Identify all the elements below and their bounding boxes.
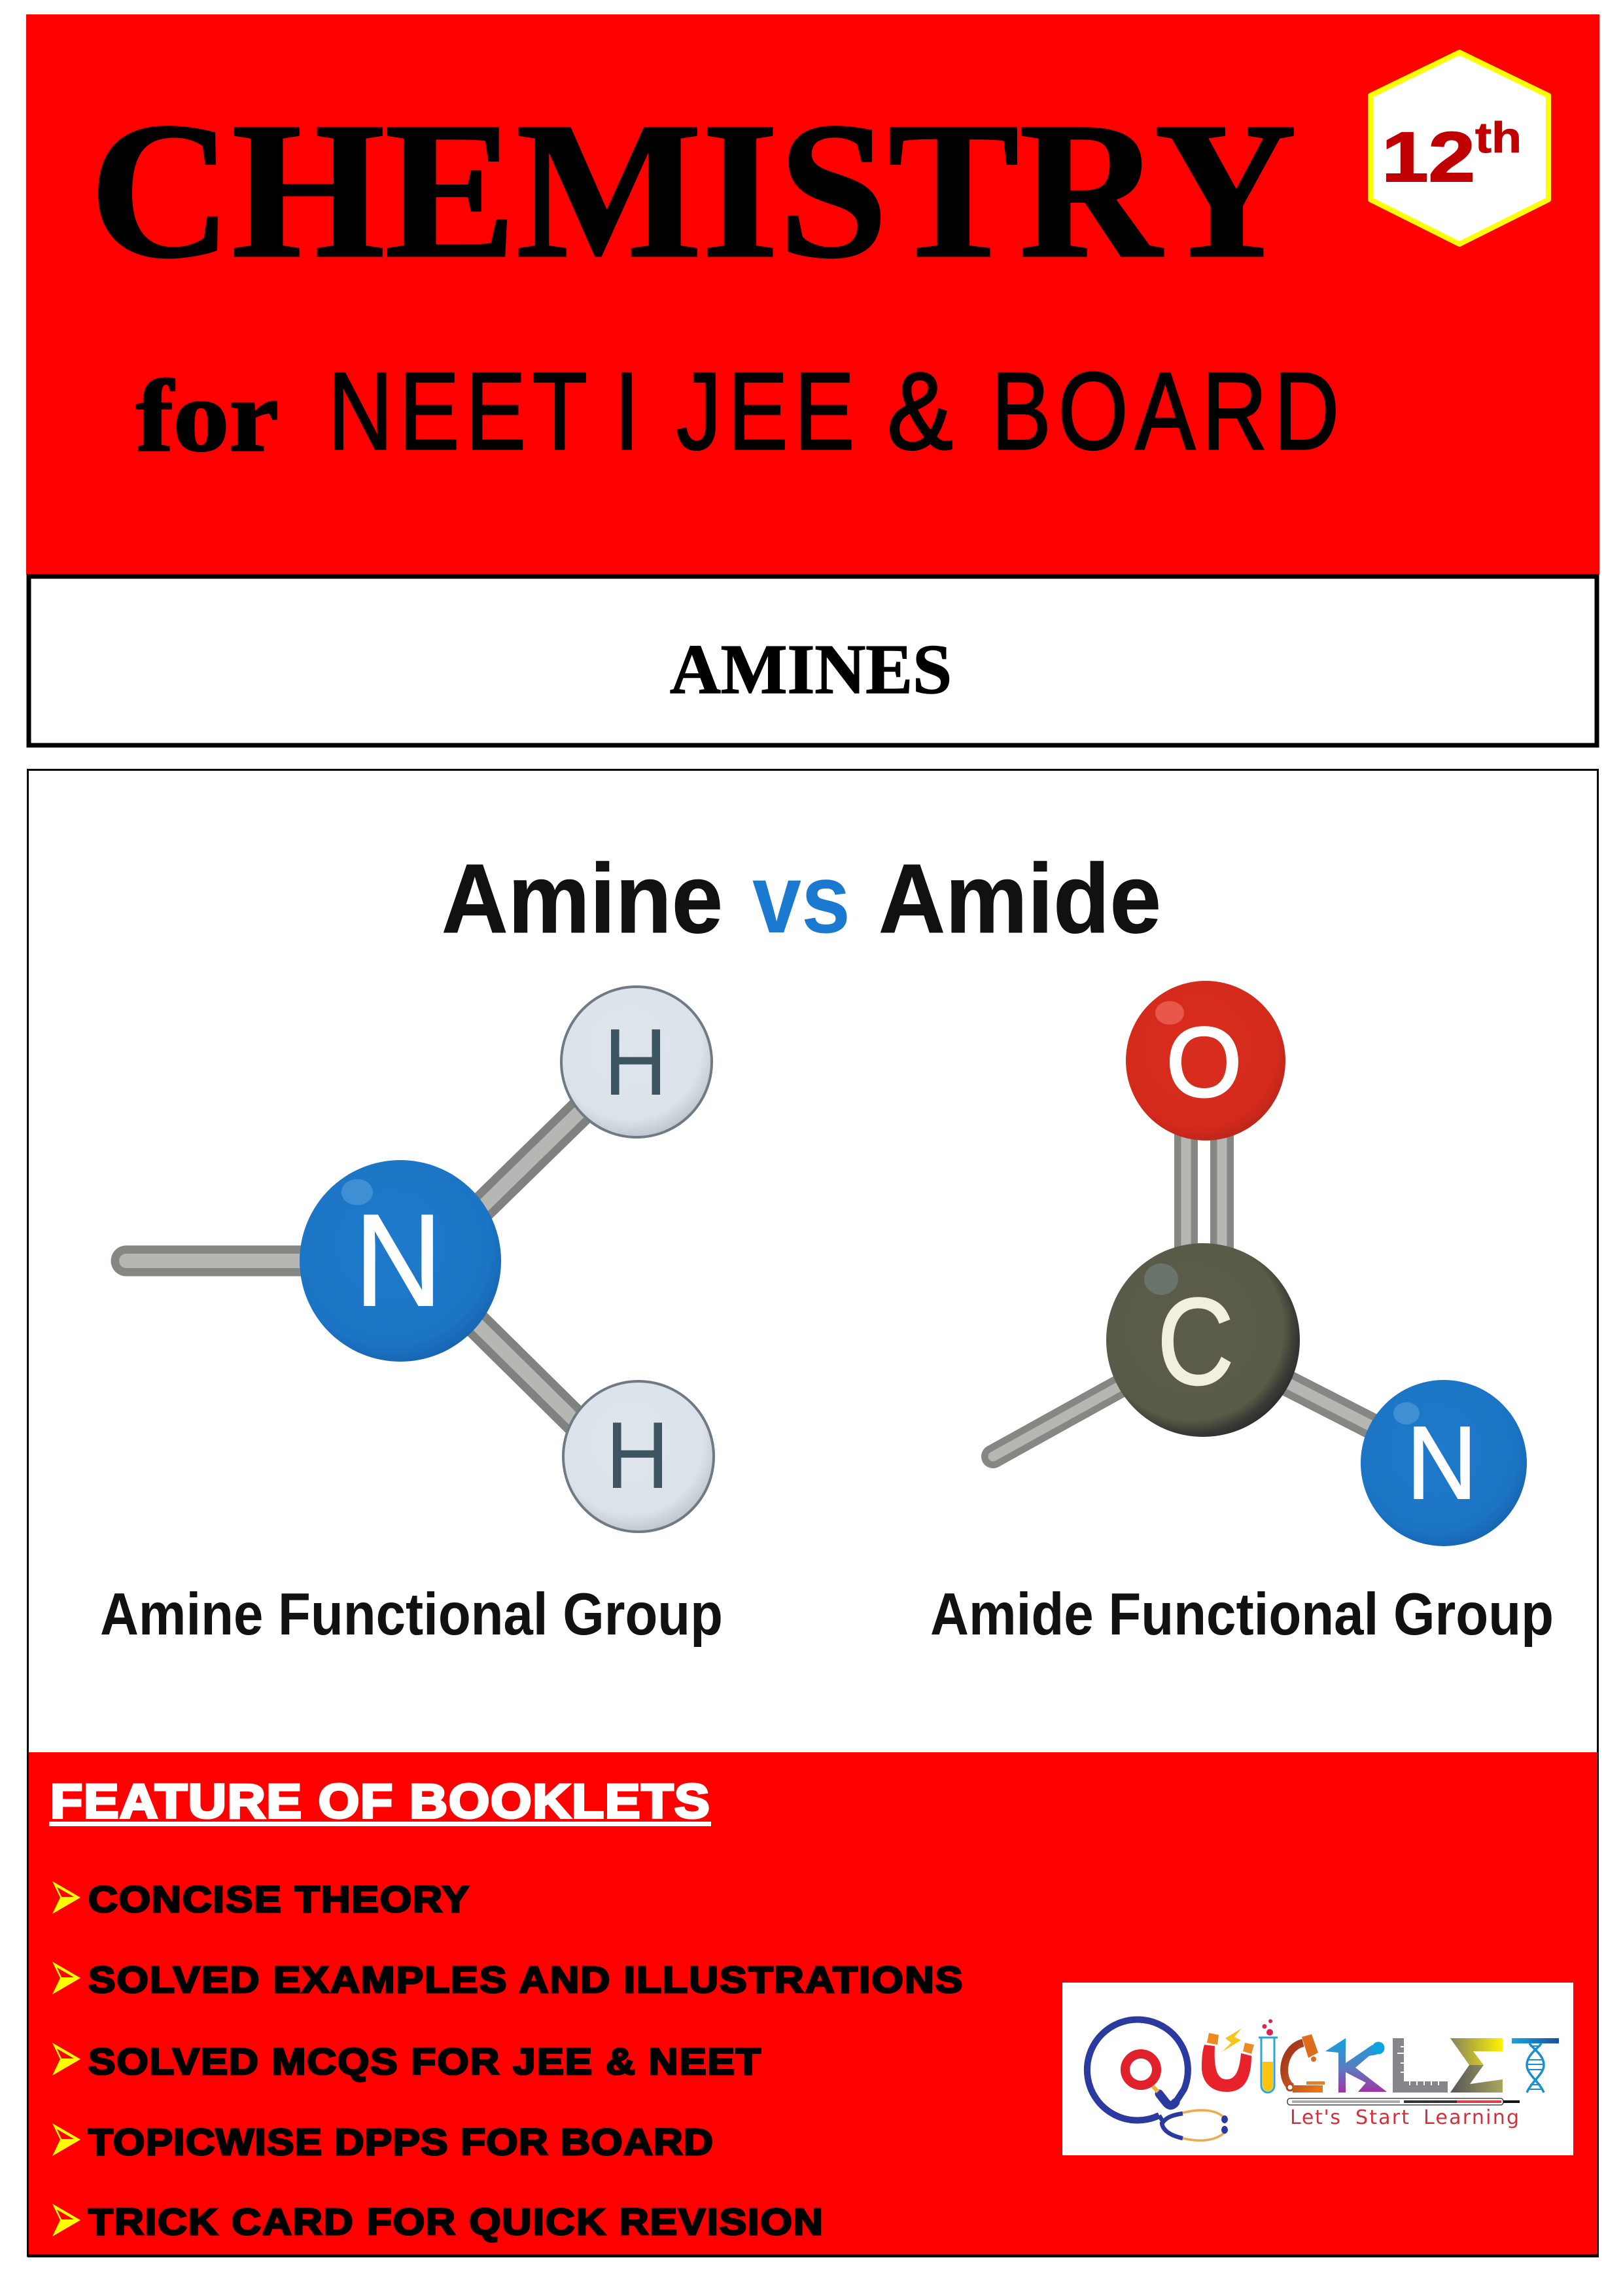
- badge: 12th class hexagon: th: [1475, 113, 1522, 162]
- caption: Amine Functional Group: Amine Functional Group: [100, 1581, 723, 1648]
- tagline: Let's Start Learning: Learning: [1423, 2106, 1519, 2129]
- subtitle: NEET I JEE and BOARD: &: [887, 349, 953, 472]
- atom: oxygen: O: [1166, 1007, 1242, 1117]
- icon: ruler L: [1393, 2038, 1448, 2093]
- diagram: amine functional group molecule: [126, 987, 714, 1532]
- icon: sigma E: [1450, 2038, 1503, 2093]
- atom: nitrogen: N: [355, 1188, 442, 1333]
- header panel: red banner: [26, 14, 1599, 574]
- tagline: Let's Start Learning: Start: [1355, 2106, 1409, 2129]
- list item: concise theory: CONCISE THEORY: [88, 1878, 469, 1920]
- heading: Amine vs Amide: Amide: [879, 843, 1161, 953]
- heading: FEATURE OF BOOKLETS: FEATURE OF BOOKLETS: [50, 1775, 710, 1828]
- features panel: red footer: [27, 1752, 1599, 2257]
- heading: Amine vs Amide: Amine: [442, 843, 723, 953]
- icon: thermometer: [1287, 2098, 1520, 2105]
- main panel: image frame: [27, 769, 1597, 2256]
- atom: hydrogen top: H: [604, 1009, 667, 1115]
- tagline: Let's Start Learning: Let's: [1290, 2106, 1340, 2129]
- subtitle: NEET I JEE and BOARD: NEET: [328, 349, 587, 472]
- icon: test tube I: [1259, 2019, 1278, 2093]
- subtitle: NEET I JEE and BOARD: JEE: [676, 349, 854, 472]
- topic box: AMINES: [29, 576, 1597, 745]
- badge: 12th class hexagon: 12: [1382, 117, 1475, 196]
- subtitle word: for: for: [136, 359, 279, 472]
- list item: solved mcqs: SOLVED MCQS FOR JEE & NEET: [88, 2040, 761, 2082]
- subtitle: NEET I JEE and BOARD: [328, 349, 1339, 472]
- diagram: amide functional group molecule: [993, 981, 1527, 1546]
- list item: solved examples: SOLVED EXAMPLES AND ILLUSTRATIONS: [88, 1958, 962, 2000]
- badge: 12th class hexagon: [1370, 52, 1548, 244]
- atom: hydrogen bottom: H: [606, 1402, 669, 1508]
- icon: magnet U: [1202, 2028, 1254, 2092]
- tagline: Let's Start Learning: [1290, 2106, 1519, 2129]
- list item: topicwise dpps: TOPICWISE DPPS FOR BOARD: [88, 2121, 713, 2163]
- title: CHEMISTRY: CHEMISTRY: [90, 82, 1297, 298]
- atom: nitrogen: N: [1406, 1405, 1477, 1521]
- icon: microscope C: [1284, 2034, 1325, 2093]
- icon: K shape: [1325, 2038, 1387, 2093]
- list item: trick card: TRICK CARD FOR QUICK REVISION: [88, 2200, 823, 2242]
- heading: Amine vs Amide: [442, 843, 1161, 953]
- atom: hydrogen bottom: [563, 1381, 714, 1532]
- atom: carbon: C: [1157, 1273, 1234, 1410]
- caption: Amide Functional Group: Amide Functional Group: [930, 1581, 1554, 1648]
- topic box: AMINES: AMINES: [670, 631, 952, 709]
- icon: Q stethoscope ring: [1087, 2019, 1228, 2140]
- subtitle: NEET I JEE and BOARD: I: [614, 349, 639, 472]
- logo: Quicklet: [1062, 1983, 1573, 2155]
- atom: oxygen: [1126, 981, 1285, 1140]
- atom: nitrogen: [1361, 1380, 1527, 1546]
- atom: carbon: [1106, 1243, 1300, 1437]
- subtitle: NEET I JEE and BOARD: BOARD: [991, 349, 1339, 472]
- heading: Amine vs Amide: vs: [752, 843, 850, 953]
- atom: nitrogen: [300, 1160, 501, 1362]
- atom: hydrogen top: [561, 987, 712, 1137]
- icon: DNA T: [1512, 2038, 1559, 2093]
